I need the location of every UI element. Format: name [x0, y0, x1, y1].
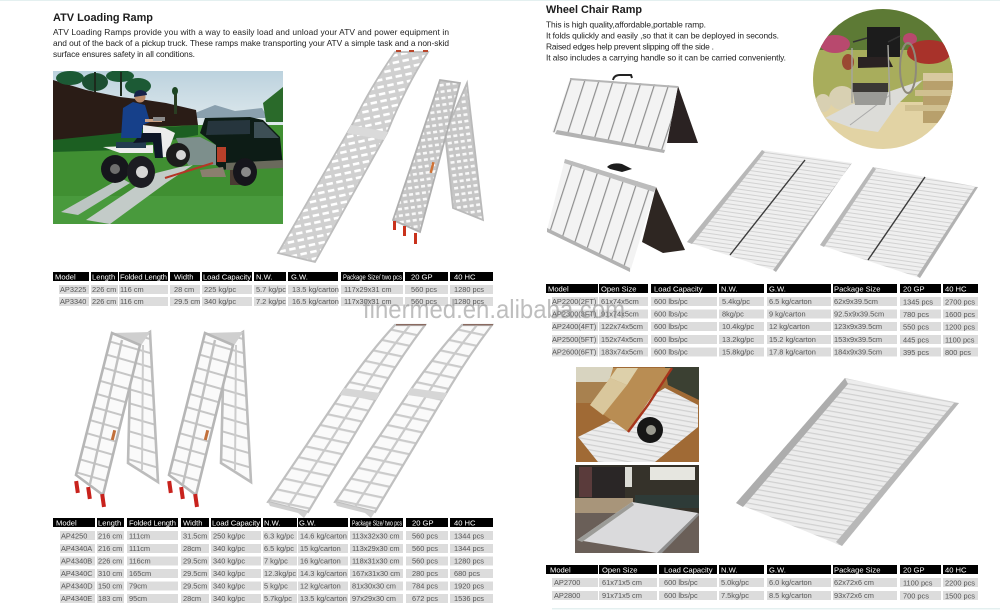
table: AP3225 and AP3340 specifications: 117x30x31 cm	[344, 297, 392, 306]
table: AP2200 to AP2600 specifications: 184x9x39.5cm	[834, 348, 882, 356]
table: AP4250 to AP4340E specifications: 118x31x30 cm	[352, 556, 400, 566]
table: AP4250 to AP4340E specifications: 20 GP	[412, 518, 434, 528]
product: folded ramp, second view	[547, 159, 685, 272]
table: AP2200 to AP2600 specifications: 600 lbs/pc	[654, 310, 688, 318]
table: AP2200 to AP2600 specifications: 10.4kg/pc	[722, 322, 754, 331]
table: AP3225 and AP3340 specifications	[53, 272, 493, 306]
table: AP3225 and AP3340 specifications: Folded Length	[120, 272, 167, 282]
table: AP2700 and AP2800 specifications: 7.5kg/pc	[721, 591, 749, 600]
table: AP2700 and AP2800 specifications: 40 HC	[945, 566, 967, 574]
table: AP2700 and AP2800 specifications: Load Capacity	[664, 566, 713, 574]
table: AP3225 and AP3340 specifications: 340 kg/pc	[204, 297, 236, 306]
product: large threshold ramp	[736, 378, 959, 546]
table: AP4250 to AP4340E specifications: 1536 pcs	[454, 594, 484, 603]
table: AP2200 to AP2600 specifications: 1600 pcs	[945, 310, 975, 319]
table: AP4250 to AP4340E specifications: AP4340A	[61, 544, 92, 553]
table: AP4250 to AP4340E specifications: 560 pcs	[412, 556, 438, 566]
table: AP2700 and AP2800 specifications: G.W.	[769, 566, 786, 574]
table: AP4250 to AP4340E specifications: 226 cm	[98, 556, 122, 566]
table: AP2200 to AP2600 specifications: 780 pcs	[903, 310, 929, 319]
table: AP4250 to AP4340E specifications: 113x32x30 cm	[352, 532, 400, 540]
text block: wheel chair ramp description	[546, 20, 786, 62]
table: AP4250 to AP4340E specifications: 560 pcs	[412, 544, 438, 553]
table: AP2200 to AP2600 specifications: 2700 pcs	[945, 298, 975, 306]
table: AP3225 and AP3340 specifications: 117x29x31 cm	[344, 285, 392, 294]
table rows: grey cell backgrounds	[552, 297, 978, 356]
table: AP2200 to AP2600 specifications: 1200 pcs	[945, 322, 975, 332]
product: straight ladder ramp, left	[268, 324, 426, 518]
table: AP4250 to AP4340E specifications: AP4250	[61, 532, 87, 540]
table: AP4250 to AP4340E specifications: 29.5cm	[183, 569, 207, 578]
table: AP4250 to AP4340E specifications: 165cm	[129, 569, 151, 578]
table: AP4250 to AP4340E specifications: 12.3kg/pc	[264, 569, 296, 578]
bottom page edge	[552, 608, 1000, 610]
table: AP3225 and AP3340 specifications: Load Capacity	[203, 272, 251, 282]
table: AP4250 to AP4340E specifications: 340 kg/pc	[213, 582, 245, 590]
table: AP2700 and AP2800 specifications: Model	[550, 566, 571, 574]
table: AP2200 to AP2600 specifications: 1345 pcs	[903, 298, 933, 306]
product: folded ramp with handle	[552, 75, 698, 153]
table: AP2200 to AP2600 specifications: 9 kg/carton	[769, 310, 806, 318]
top page edge	[0, 0, 1000, 1]
table: AP3225 and AP3340 specifications: 1280 pcs	[454, 297, 484, 306]
table: AP2700 and AP2800 specifications: 93x72x6 cm	[834, 591, 874, 600]
table: AP2700 and AP2800 specifications: 91x71x5 cm	[602, 591, 642, 600]
table: AP2200 to AP2600 specifications: N.W.	[721, 284, 737, 294]
table: AP2200 to AP2600 specifications: 61x74x5cm	[601, 297, 639, 306]
table: AP4250 to AP4340E specifications: 116cm	[129, 556, 151, 566]
table: AP3225 and AP3340 specifications: 560 pcs	[411, 297, 437, 306]
table: AP3225 and AP3340 specifications: AP3225	[60, 285, 86, 294]
table: AP4250 to AP4340E specifications: 1344 pcs	[454, 532, 484, 540]
table: AP4250 to AP4340E specifications: 40 HC	[454, 518, 476, 528]
table: AP2200 to AP2600 specifications: 445 pcs	[903, 336, 929, 344]
wheelchair	[852, 27, 916, 105]
table: AP4250 to AP4340E specifications: 680 pcs	[454, 569, 480, 578]
table: AP2200 to AP2600 specifications: 62x9x39.5cm	[834, 297, 878, 306]
ramps	[61, 178, 130, 215]
table: AP4250 to AP4340E specifications: 1344 pcs	[454, 544, 484, 553]
table: AP3225 and AP3340 specifications: 560 pcs	[411, 285, 437, 294]
table: AP4250 to AP4340E specifications: Folded Length	[129, 518, 176, 528]
photo: rider loading ATV onto pickup	[53, 70, 283, 224]
table: AP4250 to AP4340E specifications: 79cm	[129, 582, 147, 590]
table: AP4250 to AP4340E specifications: 216 cm	[98, 532, 122, 540]
table: AP3225 and AP3340 specifications: 40 HC	[454, 272, 476, 282]
text block: wheel chair ramp description: This is high quality,affordable,portable ramp.	[546, 20, 706, 30]
table: AP4250 to AP4340E specifications: 1280 pcs	[454, 556, 484, 566]
table: AP3225 and AP3340 specifications: 226 cm	[92, 297, 116, 306]
table rows: grey cell backgrounds	[60, 531, 493, 603]
panel: ATV loading ramp	[53, 12, 493, 603]
text block: wheel chair ramp description: It also includes a carrying handle so it can be carried conveniently.	[546, 52, 786, 62]
text block: ATV description: and out of the back of a pickup truck. These ramps make transporting your ATV a simple task and a non-skid	[53, 38, 449, 48]
table: AP4250 to AP4340E specifications: 6.5 kg/pc	[264, 544, 294, 553]
table: AP3225 and AP3340 specifications: 1280 pcs	[454, 285, 484, 294]
table: AP2200 to AP2600 specifications: AP2600(6FT)	[552, 348, 596, 356]
table: AP4250 to AP4340E specifications: 250 kg/pc	[213, 532, 245, 540]
table: AP2200 to AP2600 specifications: AP2300(3FT)	[552, 310, 596, 318]
table: AP3225 and AP3340 specifications: 226 cm	[92, 285, 116, 294]
table: AP2200 to AP2600 specifications: 91x74x5cm	[601, 310, 639, 318]
table: AP2200 to AP2600 specifications: AP2500(5FT)	[552, 335, 596, 344]
table: AP2700 and AP2800 specifications: 1500 pcs	[945, 592, 975, 600]
table: AP2200 to AP2600 specifications: 153x9x39.5cm	[834, 335, 882, 344]
table: AP3225 and AP3340 specifications: Width	[174, 272, 193, 282]
table: AP2700 and AP2800 specifications: Open Size	[602, 566, 637, 574]
table: AP4250 to AP4340E specifications: 280 pcs	[412, 569, 438, 578]
table: AP2700 and AP2800 specifications: 6.0 kg/carton	[769, 578, 812, 587]
table: AP2200 to AP2600 specifications: Load Capacity	[654, 284, 703, 294]
table: AP2700 and AP2800 specifications: 20 GP	[903, 566, 925, 574]
table: AP2200 to AP2600 specifications: 12 kg/carton	[769, 322, 810, 331]
table: AP4250 to AP4340E specifications: 1920 pcs	[454, 582, 484, 590]
table: AP4250 to AP4340E specifications: AP4340D	[61, 582, 93, 590]
table: AP4250 to AP4340E specifications: 672 pcs	[412, 594, 438, 603]
product: folded ladder ramp, left	[74, 332, 158, 507]
table: AP2200 to AP2600 specifications: Package Size	[834, 284, 880, 294]
photo: hand truck with boxes on ramp	[576, 367, 699, 462]
table: AP2700 and AP2800 specifications: AP2800	[554, 591, 580, 600]
table: AP2200 to AP2600 specifications: 15.8kg/pc	[722, 348, 754, 356]
table: AP4250 to AP4340E specifications: 340 kg/pc	[213, 569, 245, 578]
table: AP4250 to AP4340E specifications: 310 cm	[98, 569, 122, 578]
table: AP4250 to AP4340E specifications: 5 kg/pc	[264, 582, 288, 590]
table: AP4250 to AP4340E specifications: 111cm	[129, 532, 150, 540]
table: AP2200 to AP2600 specifications: 6.5 kg/carton	[769, 297, 812, 306]
table: AP4250 to AP4340E specifications: N.W.	[264, 518, 280, 528]
table: AP4250 to AP4340E specifications: AP4340E	[61, 594, 92, 603]
table: AP4250 to AP4340E specifications: 14.6 kg/carton	[300, 532, 347, 540]
table: AP4250 to AP4340E specifications: 12 kg/carton	[300, 582, 341, 590]
table: AP2700 and AP2800 specifications: N.W.	[721, 566, 737, 574]
table: AP4250 to AP4340E specifications: 150 cm	[98, 582, 122, 590]
table: AP4250 to AP4340E specifications: 28cm	[183, 544, 201, 553]
table: AP3225 and AP3340 specifications: AP3340	[60, 297, 86, 306]
table: AP4250 to AP4340E specifications: 111cm	[129, 544, 150, 553]
table: AP2700 and AP2800 specifications: 8.5 kg/carton	[769, 591, 812, 600]
text block: wheel chair ramp description: It folds qulickly and easily ,so that it can be deployed in seconds.	[546, 30, 779, 40]
table: AP4250 to AP4340E specifications: 7 kg/pc	[264, 556, 288, 566]
table: AP3225 and AP3340 specifications: 116 cm	[120, 285, 144, 294]
table: AP4250 to AP4340E specifications: 183 cm	[98, 594, 122, 603]
table: AP2200 to AP2600 specifications: AP2200(2FT)	[552, 297, 596, 306]
table: AP4250 to AP4340E specifications: 340 kg/pc	[213, 594, 245, 603]
table: AP4250 to AP4340E specifications: Width	[183, 518, 202, 528]
table: AP2700 and AP2800 specifications: 600 lbs/pc	[664, 591, 698, 600]
panel: wheel chair ramp	[546, 4, 978, 600]
table: AP2200 to AP2600 specifications: 13.2kg/pc	[722, 335, 754, 344]
table: AP4250 to AP4340E specifications: Package Size/ two pcs	[352, 518, 402, 528]
table: AP4250 to AP4340E specifications: 95cm	[129, 594, 147, 603]
product: folded perforated ramp	[393, 80, 483, 244]
table: AP3225 and AP3340 specifications: Model	[55, 272, 76, 282]
photo: threshold ramp at doorway	[575, 465, 699, 555]
table: AP4250 to AP4340E specifications: 29.5cm	[183, 582, 207, 590]
table: AP2200 to AP2600 specifications: Model	[548, 284, 569, 294]
table: AP2700 and AP2800 specifications: AP2700	[554, 578, 580, 587]
table: AP2700 and AP2800 specifications: 62x72x6 cm	[834, 578, 874, 587]
table: AP4250 to AP4340E specifications: 167x31x30 cm	[352, 569, 400, 578]
table: AP2700 and AP2800 specifications	[546, 565, 978, 600]
table: AP4250 to AP4340E specifications: 97x29x30 cm	[352, 594, 396, 603]
table: AP2700 and AP2800 specifications: Package Size	[834, 566, 880, 574]
heading: ATV Loading Ramp: ATV Loading Ramp	[53, 12, 153, 24]
table: AP2200 to AP2600 specifications: G.W.	[769, 284, 786, 294]
table: AP2200 to AP2600 specifications: Open Size	[601, 284, 636, 294]
text block: ATV description: ATV Loading Ramps provide you with a way to easily load and unload your ATV and power equipment in	[53, 27, 449, 37]
table: AP3225 and AP3340 specifications: 7.2 kg/pc	[256, 297, 286, 306]
ATV and rider	[101, 90, 190, 188]
text block: ATV description	[53, 27, 449, 59]
table: AP3225 and AP3340 specifications: 225 kg/pc	[204, 285, 236, 294]
table: AP4250 to AP4340E specifications: 6.3 kg/pc	[264, 532, 294, 540]
table: AP3225 and AP3340 specifications: Length	[92, 272, 115, 282]
table: AP4250 to AP4340E specifications: 560 pcs	[412, 532, 438, 540]
table: AP2700 and AP2800 specifications: 600 lbs/pc	[664, 578, 698, 587]
table: AP2700 and AP2800 specifications: 2200 pcs	[945, 578, 975, 588]
table: AP2700 and AP2800 specifications: 700 pcs	[903, 592, 929, 600]
table: AP4250 to AP4340E specifications: Load Capacity	[212, 518, 260, 528]
table: AP2200 to AP2600 specifications: 800 pcs	[945, 348, 971, 357]
table: AP2200 to AP2600 specifications: 15.2 kg/carton	[769, 335, 816, 344]
table: AP2200 to AP2600 specifications: 152x74x5cm	[601, 335, 643, 344]
table: AP3225 and AP3340 specifications: 16.5 kg/carton	[292, 297, 339, 306]
table: AP3225 and AP3340 specifications: 13.5 kg/carton	[292, 285, 339, 294]
table: AP4250 to AP4340E specifications: 216 cm	[98, 544, 122, 553]
product: unfolded perforated ramp	[278, 50, 428, 262]
table: AP2200 to AP2600 specifications: 8kg/pc	[722, 310, 744, 318]
table: AP4250 to AP4340E specifications: AP4340B	[61, 556, 92, 566]
table: AP3225 and AP3340 specifications: G.W.	[291, 272, 308, 282]
table: AP4250 to AP4340E specifications: 16 kg/carton	[300, 556, 341, 566]
table: AP2200 to AP2600 specifications: 40 HC	[945, 284, 967, 294]
table: AP4250 to AP4340E specifications: 14.3 kg/carton	[300, 569, 347, 578]
table: AP2200 to AP2600 specifications: 122x74x5cm	[601, 322, 643, 331]
table: AP4250 to AP4340E specifications: 113x29x30 cm	[352, 544, 400, 553]
table: AP2200 to AP2600 specifications: 183x74x5cm	[601, 348, 643, 356]
table: AP4250 to AP4340E specifications: G.W.	[299, 518, 316, 528]
table: AP4250 to AP4340E specifications: 13.5 kg/carton	[300, 594, 347, 603]
table: AP4250 to AP4340E specifications	[53, 518, 493, 603]
table: AP2200 to AP2600 specifications: AP2400(4FT)	[552, 322, 596, 331]
table: AP2200 to AP2600 specifications: 395 pcs	[903, 348, 929, 357]
table: AP2200 to AP2600 specifications: 5.4kg/pc	[722, 297, 750, 306]
table: AP4250 to AP4340E specifications: 31.5cm	[183, 532, 207, 540]
product: opened ramp, left	[687, 150, 852, 272]
watermark: finermed.en.alibaba.com	[363, 294, 625, 324]
table: AP3225 and AP3340 specifications: N.W.	[256, 272, 272, 282]
table: AP2200 to AP2600 specifications: 600 lbs/pc	[654, 335, 688, 344]
table: AP2200 to AP2600 specifications	[546, 284, 978, 357]
table: AP2200 to AP2600 specifications: 600 lbs/pc	[654, 322, 688, 331]
table: AP4250 to AP4340E specifications: AP4340C	[61, 569, 93, 578]
table: AP2200 to AP2600 specifications: 123x9x39.5cm	[834, 322, 882, 331]
table: AP4250 to AP4340E specifications: 340 kg/pc	[213, 556, 245, 566]
table: AP2700 and AP2800 specifications: 5.0kg/pc	[721, 578, 749, 587]
table: AP4250 to AP4340E specifications: 29.5cm	[183, 556, 207, 566]
heading: Wheel Chair Ramp: Wheel Chair Ramp	[546, 4, 642, 16]
table: AP2200 to AP2600 specifications: 600 lbs/pc	[654, 348, 688, 356]
table: AP3225 and AP3340 specifications: 5.7 kg/pc	[256, 285, 286, 294]
truck	[176, 117, 283, 186]
table: AP3225 and AP3340 specifications: 29.5 cm	[174, 297, 200, 306]
table: AP2200 to AP2600 specifications: 550 pcs	[903, 322, 929, 332]
table: AP3225 and AP3340 specifications: Package Size/ two pcs	[343, 272, 402, 282]
photo: wheelchair on ramp (circle)	[813, 9, 957, 150]
table: AP2700 and AP2800 specifications: 1100 pcs	[903, 578, 933, 588]
table: AP4250 to AP4340E specifications: 15 kg/carton	[300, 544, 341, 553]
text block: ATV description: surface ensures safety in all conditions.	[53, 49, 195, 59]
table: AP2700 and AP2800 specifications: 61x71x5 cm	[602, 578, 642, 587]
product: opened ramp, right	[820, 167, 978, 278]
table: AP4250 to AP4340E specifications: Model	[56, 518, 77, 528]
table: AP4250 to AP4340E specifications: 81x30x30 cm	[352, 582, 396, 590]
table: AP2200 to AP2600 specifications: 17.8 kg/carton	[769, 348, 816, 356]
table: AP4250 to AP4340E specifications: 28cm	[183, 594, 201, 603]
table: AP2200 to AP2600 specifications: 92.5x9x39.5cm	[834, 310, 884, 318]
table: AP4250 to AP4340E specifications: Length	[98, 518, 121, 528]
table: AP2200 to AP2600 specifications: 1100 pcs	[945, 336, 975, 344]
table: AP4250 to AP4340E specifications: 784 pcs	[412, 582, 438, 590]
table: AP3225 and AP3340 specifications: 28 cm	[174, 285, 194, 294]
table: AP2200 to AP2600 specifications: 600 lbs/pc	[654, 297, 688, 306]
table: AP3225 and AP3340 specifications: 116 cm	[120, 297, 144, 306]
table: AP3225 and AP3340 specifications: 20 GP	[411, 272, 433, 282]
table: AP4250 to AP4340E specifications: 340 kg/pc	[213, 544, 245, 553]
product: folded ladder ramp, right	[167, 332, 251, 507]
product: straight ladder ramp, right	[335, 324, 493, 518]
text block: wheel chair ramp description: Raised edges help prevent slipping off the side .	[546, 42, 714, 52]
table: AP4250 to AP4340E specifications: 5.7kg/pc	[264, 594, 292, 603]
table: AP2200 to AP2600 specifications: 20 GP	[903, 284, 925, 294]
